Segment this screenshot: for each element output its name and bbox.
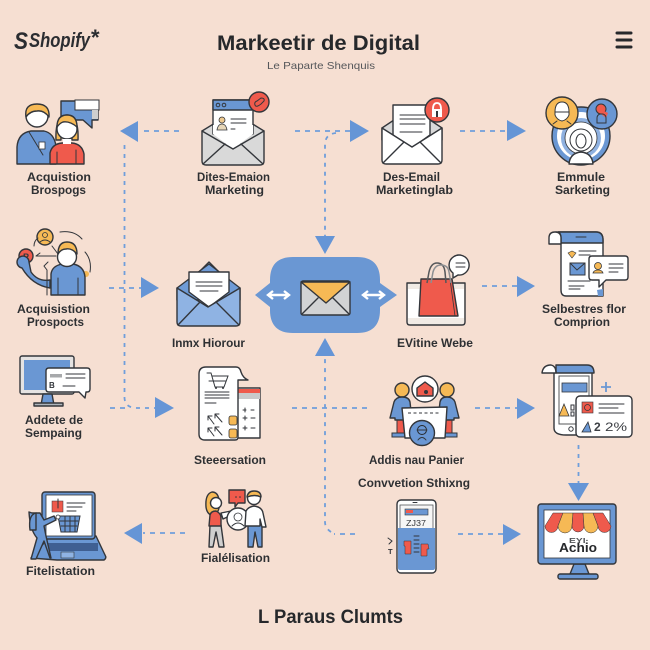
panel: inbox [172, 262, 245, 350]
label: Sarketing [555, 183, 610, 197]
panel: online shop [538, 504, 616, 579]
icon: storefront monitor: EYI· [569, 538, 589, 545]
icon: storefront monitor [538, 504, 616, 579]
arrow: shop to comparison [482, 276, 535, 297]
arrow: cart to shop [568, 445, 589, 501]
panel: add to cart [358, 376, 470, 490]
arrow: top link to central hub [315, 133, 336, 254]
arrow: vertical link to audience [110, 145, 174, 418]
icon: two people at table [390, 376, 459, 446]
arrow: loyalty to laptop [124, 523, 185, 544]
label: add to cart: Addis nau Panier [369, 453, 464, 467]
icon: woman and man with speech bubble [206, 490, 266, 547]
icon: shopping bag with speech bubble [407, 255, 469, 325]
icon: receipt and data card [199, 367, 260, 440]
label [27, 170, 91, 197]
logo: Shopify: * [91, 25, 100, 50]
label: Prospocts [27, 315, 84, 329]
arrow: audience to cart [292, 398, 535, 419]
label: Dites-Emaion [197, 170, 270, 184]
panel: web storefront [397, 255, 473, 350]
panel: central email hub [255, 257, 397, 333]
icon: white envelope with lock badge [382, 98, 449, 164]
subtitle: Le Paparte Shenquis [267, 60, 375, 72]
panel: acquisition prospects [17, 229, 90, 329]
label [17, 302, 90, 329]
label: EVitine Webe [397, 336, 473, 350]
panel: loyalty people [201, 490, 270, 565]
label: Inmx Hiorour [172, 336, 245, 350]
icon: hub envelope [301, 281, 350, 315]
icon: phone document and card [542, 365, 632, 437]
hub shape [255, 257, 397, 333]
panel: cart stats [542, 365, 632, 437]
label: Addete de [25, 413, 83, 427]
label: Acquistion [27, 170, 91, 184]
panel: email marketing lab [376, 98, 453, 197]
icon: left double arrow [268, 291, 289, 299]
icon: storefront monitor: Achio [559, 541, 597, 555]
label: Steeersation [194, 453, 266, 467]
label: Comprion [554, 315, 610, 329]
logo: Shopify: S [14, 28, 28, 55]
icon: smartphone: ZJ37 [406, 519, 427, 528]
label: Acquisistion [17, 302, 90, 316]
label: Brospogs [31, 183, 86, 197]
icon: menu [617, 33, 631, 47]
arrow: email to email lab [295, 120, 369, 142]
label: Des-Email [383, 170, 440, 184]
icon: right double arrow [363, 291, 384, 299]
label: Fitelistation [26, 564, 95, 578]
icon: blue envelope [177, 262, 240, 326]
panel: mobile phone [388, 500, 436, 573]
label [376, 170, 453, 197]
arrow: bottom link to central hub [315, 338, 355, 534]
label: Fialélisation [201, 551, 270, 565]
label: Marketing [205, 183, 264, 197]
arrow: phone to shop [458, 524, 521, 545]
icon: laptop with shopper and cart [29, 492, 106, 560]
label: conversion: Convvetion Sthixng [358, 476, 470, 490]
icon: phone document and card: 2% [605, 420, 627, 434]
label: Emmule [557, 170, 605, 184]
icon: rings with avatars [546, 97, 617, 165]
logo: Shopify: Shopify [29, 30, 91, 52]
icon: phone document and card: 2 [594, 420, 601, 434]
label [25, 413, 83, 440]
logo: Shopify [14, 25, 100, 55]
icon: gray envelope with profile [202, 92, 269, 165]
arrow: email to acquisition [120, 121, 179, 142]
panel: email marketing [197, 92, 270, 197]
label: Marketinglab [376, 183, 453, 197]
title: Markeetir de Digital [217, 32, 420, 55]
label: Sempaing [25, 426, 82, 440]
panel: conversation [194, 367, 266, 467]
arrow: prospects to inbox [109, 277, 159, 298]
label: Selbestres flor [542, 302, 626, 316]
panel: social marketing [546, 97, 617, 197]
arrow: email lab to social marketing [460, 120, 526, 141]
panel: fidelisation laptop [26, 492, 106, 578]
icon: two people with chat [17, 100, 99, 164]
label [542, 302, 626, 329]
icon: person with circles and arrows: P [23, 252, 29, 262]
icon: monitor with chat card: B [49, 381, 55, 390]
icon: phone side marks: T [388, 547, 393, 556]
panel: campaign [20, 356, 90, 440]
bottom heading: L Paraus Clumts [258, 607, 403, 628]
panel: acquisition prospects top [17, 100, 99, 197]
label [197, 170, 270, 197]
icon: document with profile bubble [549, 232, 628, 296]
panel: comparison [542, 232, 628, 329]
label [555, 170, 610, 197]
